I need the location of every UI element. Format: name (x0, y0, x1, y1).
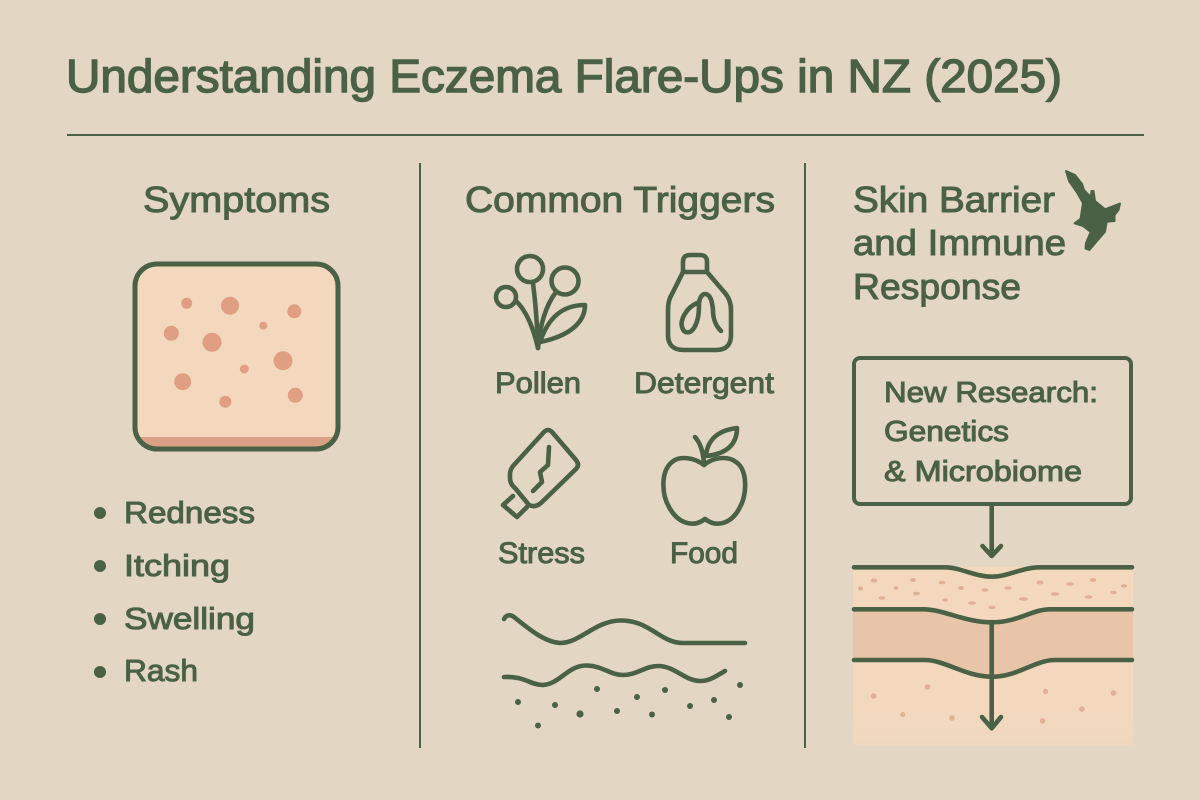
icon: stress tube (503, 430, 578, 517)
callout: new research: & Microbiome (884, 456, 1082, 488)
symptom list: Redness (124, 495, 255, 530)
icon: skin patch with red spots (135, 264, 338, 449)
symptom list (94, 495, 255, 688)
heading: skin barrier and immune response (853, 179, 1066, 307)
icon: detergent bottle (668, 255, 731, 350)
callout: new research: Genetics (884, 416, 1009, 448)
heading: skin barrier and immune response: Response (853, 266, 1021, 307)
heading: common triggers: Common Triggers (465, 179, 775, 220)
title: Understanding Eczema Flare-Ups in NZ (2025) (66, 50, 1062, 102)
panel: common triggers (465, 179, 775, 728)
panel: symptoms (94, 179, 338, 688)
label: food: Food (670, 537, 738, 570)
icon: New Zealand map (1066, 171, 1120, 250)
icon: apple (663, 428, 745, 524)
panel: skin barrier and immune response (853, 171, 1133, 745)
label: detergent: Detergent (634, 367, 775, 400)
heading: skin barrier and immune response: and Immune (853, 222, 1066, 263)
heading: skin barrier and immune response: Skin Barrier (853, 179, 1055, 220)
diagram: skin layers (853, 567, 1133, 745)
callout: new research: New Research: (884, 377, 1098, 409)
symptom list: Rash (124, 653, 198, 688)
wavy lines and particles (504, 615, 745, 728)
arrow: callout to skin (982, 505, 1001, 556)
label: stress: Stress (498, 537, 585, 570)
label: pollen: Pollen (495, 367, 581, 400)
callout: new research (854, 358, 1131, 504)
icon: pollen (496, 256, 585, 348)
symptom list: Itching (124, 548, 230, 583)
heading: symptoms: Symptoms (143, 179, 330, 220)
symptom list: Swelling (124, 601, 255, 636)
